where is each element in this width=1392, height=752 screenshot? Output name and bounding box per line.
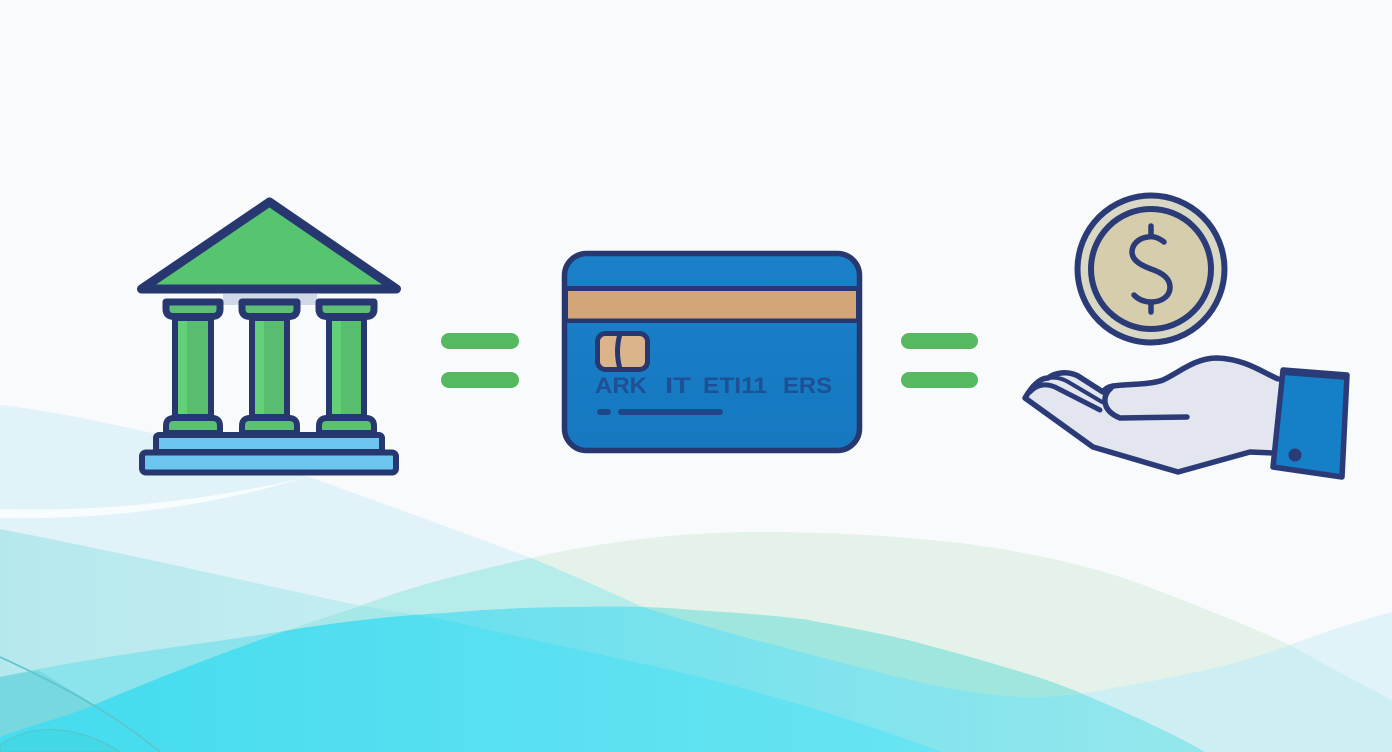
upper step [156, 435, 382, 452]
card text: ETI11 [703, 373, 767, 398]
card number dashes [597, 409, 723, 415]
left column [166, 302, 220, 433]
middle column [242, 302, 297, 433]
icon: open hand with cuff [1025, 358, 1347, 477]
background waves [0, 405, 1392, 752]
icon: dollar coin [1078, 196, 1224, 342]
icon: credit card [564, 254, 860, 450]
icon: first equals sign [441, 333, 519, 388]
icon: second equals sign [901, 333, 978, 388]
card text: IT [665, 373, 692, 398]
card text: ERS [783, 373, 832, 398]
bank roof pediment [142, 202, 396, 289]
card body [564, 254, 860, 450]
card chip [598, 334, 648, 370]
lower step [142, 452, 396, 472]
shirt cuff [1273, 370, 1347, 477]
hand [1025, 358, 1278, 472]
cuff button [1288, 448, 1302, 462]
roof shadow [223, 294, 317, 305]
magnetic stripe [567, 286, 857, 323]
card text: ARK [595, 373, 647, 398]
icon: bank building [142, 202, 396, 472]
right column [319, 302, 374, 433]
dollar sign [1132, 226, 1170, 312]
